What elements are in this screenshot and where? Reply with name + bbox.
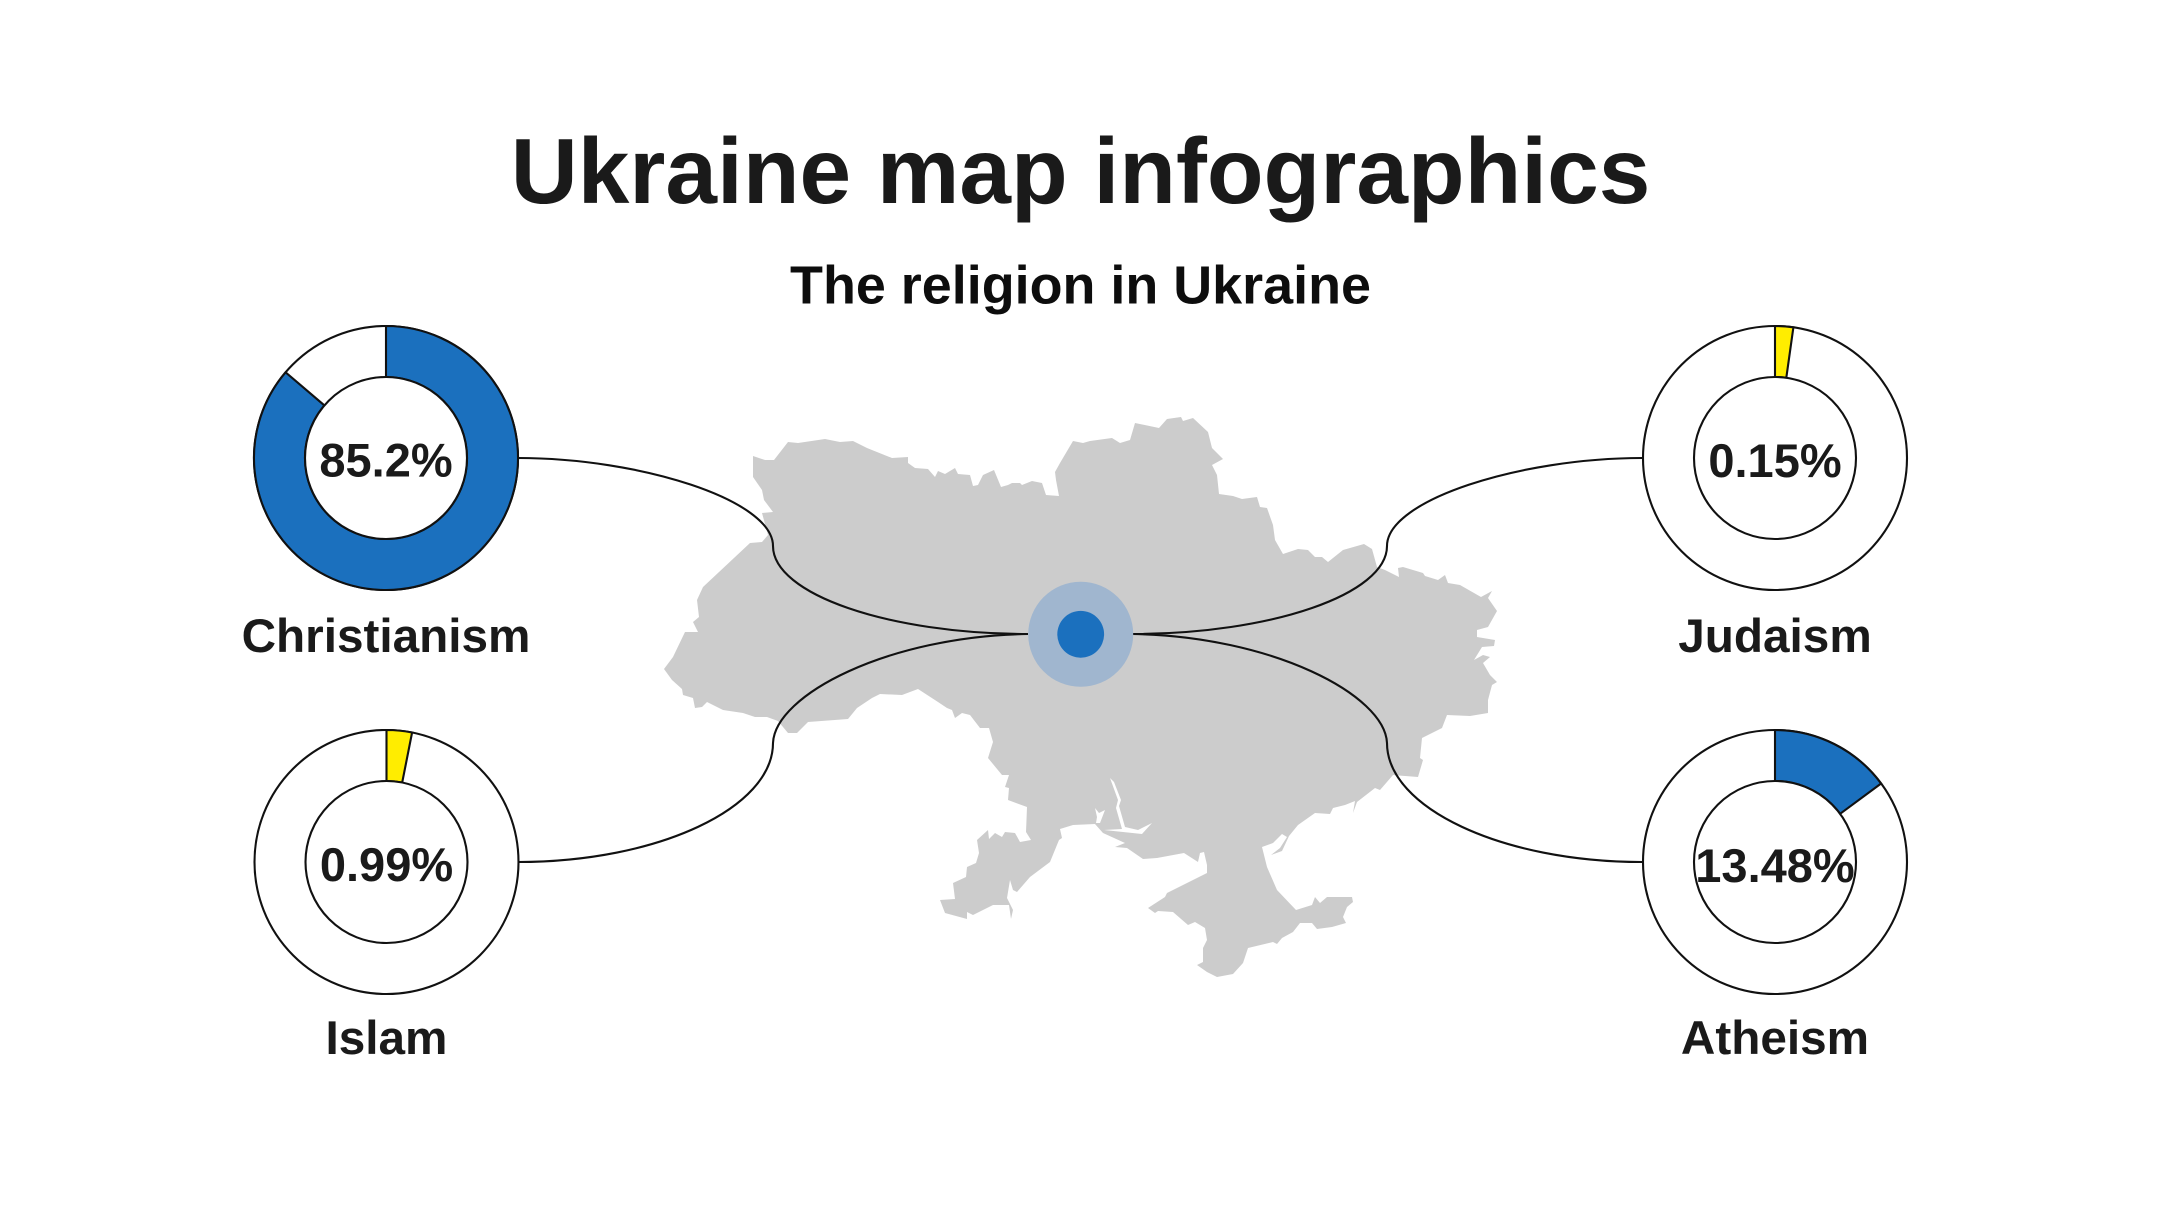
label: Atheism: Atheism xyxy=(1681,1012,1869,1065)
donut: Christianism xyxy=(254,326,518,590)
donut: Atheism xyxy=(1643,730,1907,994)
title: Ukraine map infographics xyxy=(511,119,1650,223)
label: Judaism: Judaism xyxy=(1678,610,1872,663)
connector: Christianism to centre xyxy=(518,458,1028,634)
donut: Christianism: 85.2% xyxy=(319,434,453,486)
donut: Judaism xyxy=(1643,326,1907,590)
donut: Judaism: 0.15% xyxy=(1708,434,1842,487)
donut: Atheism: 13.48% xyxy=(1695,839,1855,892)
donut: Islam: 0.99% xyxy=(320,838,453,891)
connector: Judaism to centre xyxy=(1132,458,1642,634)
connector: Atheism to centre xyxy=(1132,634,1642,862)
map of Ukraine xyxy=(664,417,1497,977)
label: Christianism: Christianism xyxy=(242,610,530,663)
location marker: Kyiv xyxy=(1028,582,1133,687)
donut: Islam xyxy=(254,730,518,994)
label: Islam: Islam xyxy=(326,1012,447,1065)
connector: Islam to centre xyxy=(518,634,1028,862)
subtitle: The religion in Ukraine xyxy=(790,256,1371,316)
